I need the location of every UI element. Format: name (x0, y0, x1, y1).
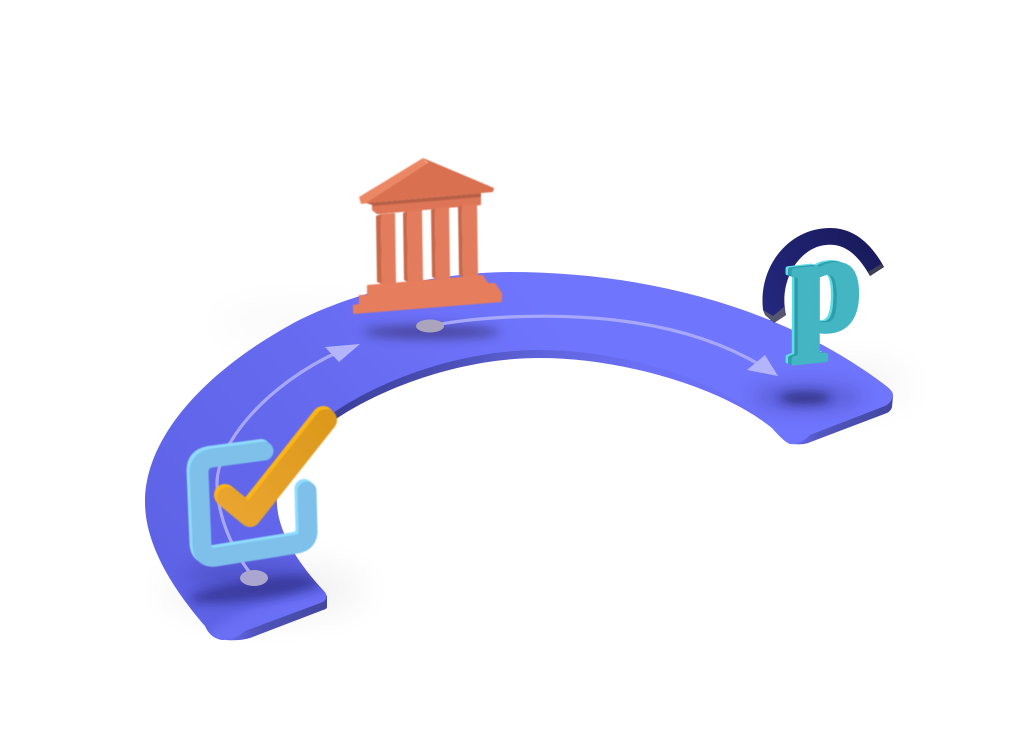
teal letter p: p (792, 204, 862, 364)
pediment roof (359, 158, 494, 204)
start dot 2 (416, 320, 444, 332)
left end thickness (226, 592, 327, 640)
arrowhead 2 (747, 355, 778, 376)
icon: publisher arc and letter p (762, 202, 884, 364)
contact shadows on road (185, 325, 863, 657)
icon: checkbox with tick (196, 417, 326, 557)
tick mark (225, 417, 326, 516)
route line 1 with start dot and arrow (217, 344, 360, 586)
navy arc (762, 228, 884, 323)
route line 2 with start dot and arrow (416, 316, 778, 376)
scene: curved journey illustration (144, 158, 894, 640)
inner arc underside edge (320, 320, 772, 431)
entablature (366, 193, 481, 214)
right end thickness (792, 396, 893, 444)
start dot 1 (240, 570, 268, 586)
four columns (376, 204, 478, 285)
ground shadows on white background (165, 302, 910, 612)
stepped base (353, 275, 502, 314)
arrowhead 1 (325, 344, 360, 362)
checkbox outline (196, 448, 308, 557)
teal letter p: p (786, 202, 856, 362)
teal letter p: p (788, 203, 859, 363)
road top surface (145, 272, 893, 640)
panel: curved purple road (145, 272, 893, 640)
icon: classical institution building (353, 158, 502, 314)
